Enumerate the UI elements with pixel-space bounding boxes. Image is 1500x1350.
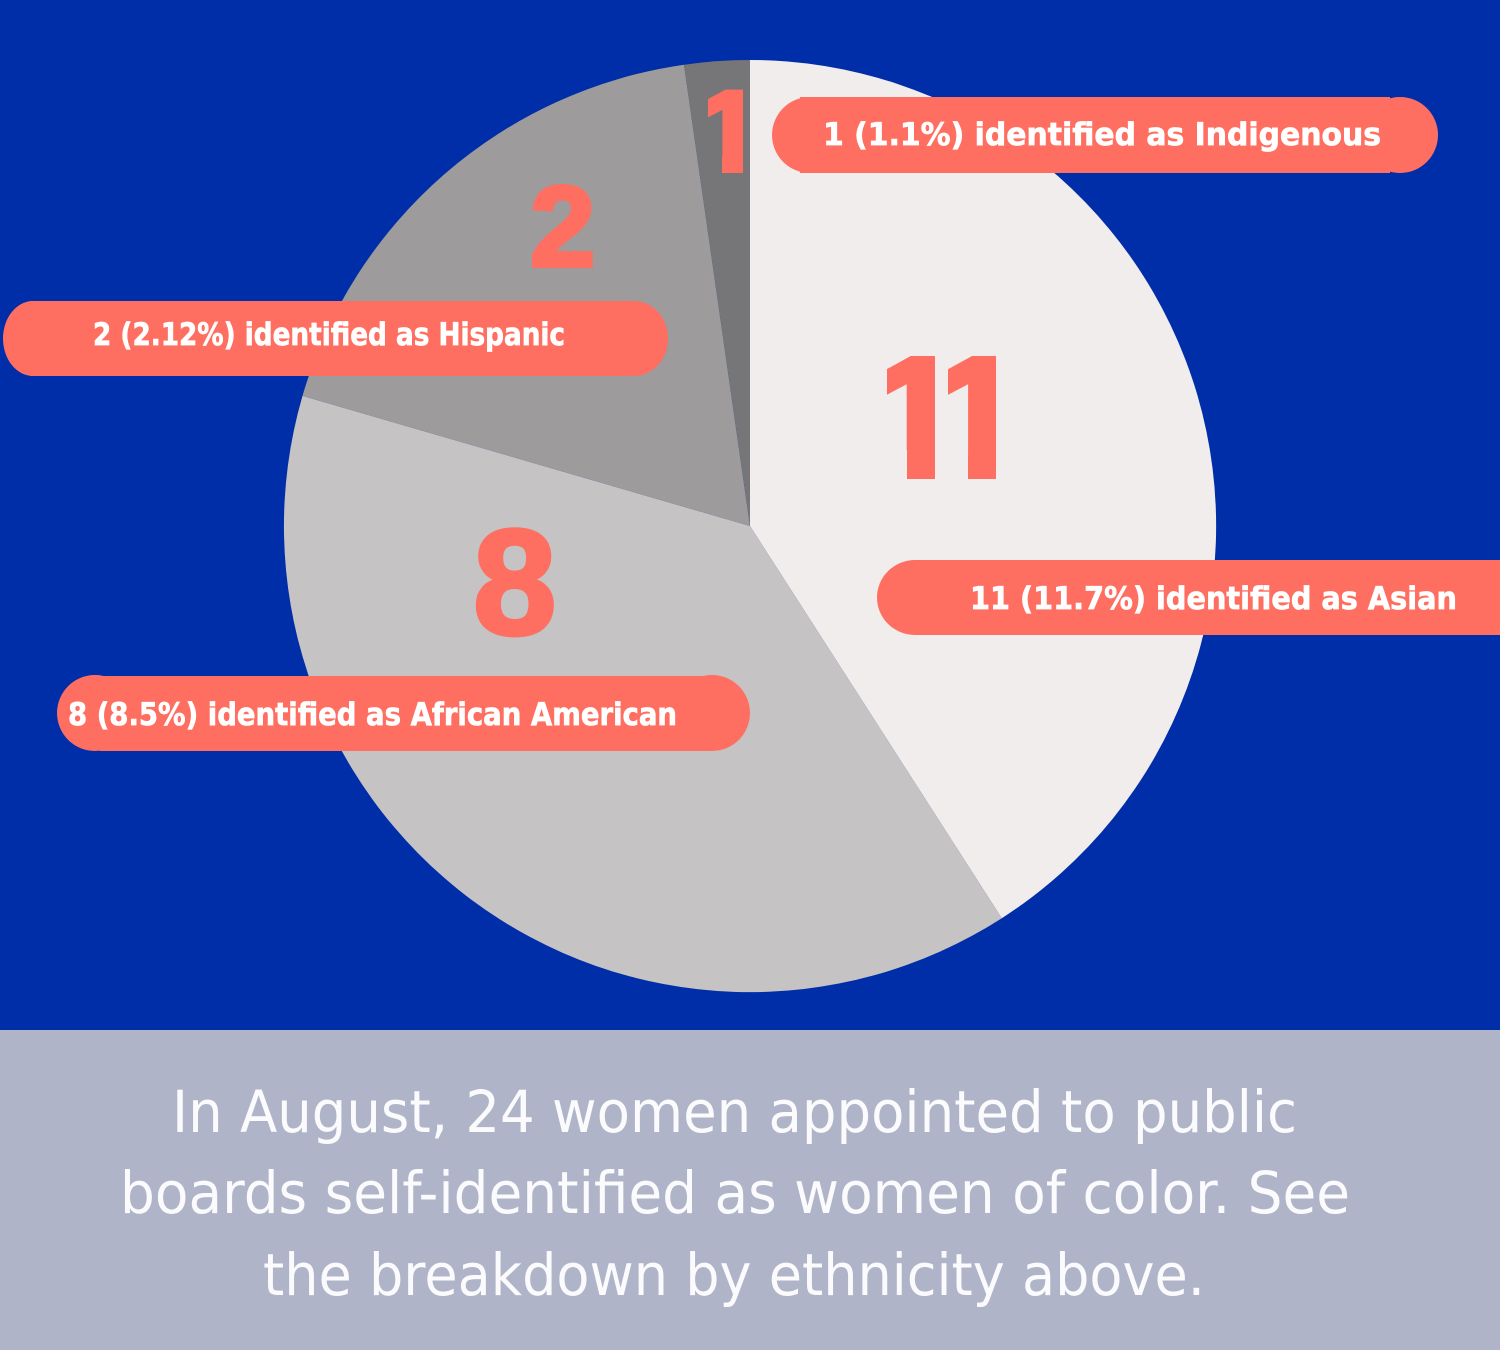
caption text: [120, 1078, 1350, 1309]
slice: African American: [284, 396, 1002, 992]
number: 8: 8: [473, 498, 556, 666]
caption text: In August, 24 women appointed to public: [172, 1078, 1297, 1146]
callout: Hispanic: 2 (2.12%) identified as Hispanic: [93, 317, 565, 353]
caption panel: [0, 1030, 1500, 1350]
caption text: the breakdown by ethnicity above.: [263, 1241, 1205, 1309]
callout: African American: [57, 675, 750, 751]
caption text: boards self-identified as women of color. See: [120, 1159, 1350, 1227]
slice: Indigenous: [684, 60, 750, 526]
callout: Asian: 11 (11.7%) identified as Asian: [970, 581, 1457, 617]
callout: Indigenous: [772, 97, 1438, 173]
pie chart: [284, 60, 1216, 992]
callout: Hispanic: [3, 301, 668, 376]
background: [0, 0, 1500, 1030]
number: 2: 2: [530, 163, 595, 291]
slice: Hispanic: [302, 65, 750, 526]
number: 1: 1: [694, 67, 770, 195]
callout: African American: 8 (8.5%) identified as African American: [68, 697, 677, 733]
number: 11: 11: [863, 323, 1032, 513]
slice: Asian: [750, 60, 1216, 918]
callout: Asian: [877, 560, 1500, 635]
callout: Indigenous: 1 (1.1%) identified as Indigenous: [823, 117, 1381, 153]
